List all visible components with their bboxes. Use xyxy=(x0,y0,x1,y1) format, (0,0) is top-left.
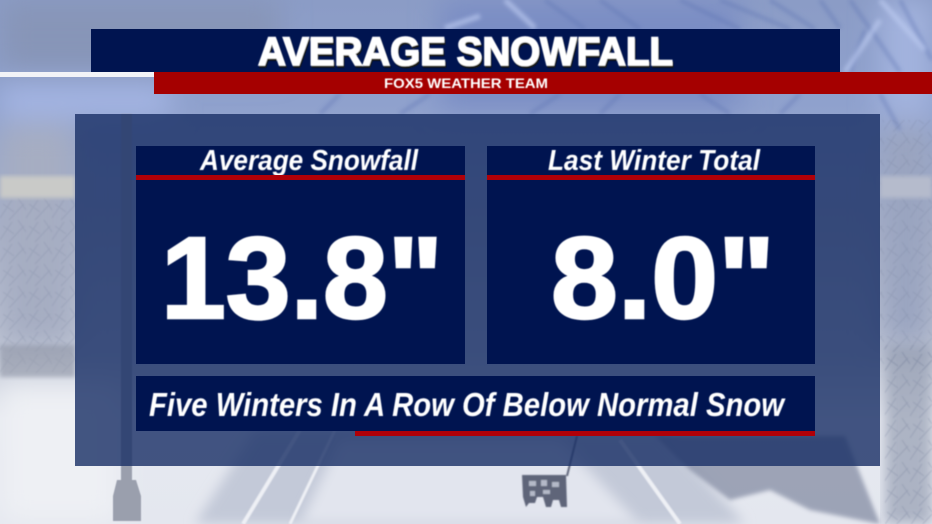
card: average snowfall xyxy=(136,145,465,364)
footer banner xyxy=(136,376,815,436)
snowy path xyxy=(195,430,745,524)
card heading: Average Snowfall xyxy=(199,145,419,177)
value: 13.8" xyxy=(161,213,443,343)
lamp post xyxy=(113,114,141,521)
red rule xyxy=(487,175,815,180)
title text: AVERAGE SNOWFALL xyxy=(258,30,673,74)
translucent navy panel xyxy=(75,114,880,466)
card: last winter total xyxy=(487,145,815,364)
red rule xyxy=(136,175,465,180)
evergreen branches xyxy=(655,436,880,524)
red rule xyxy=(355,431,815,436)
white accent line xyxy=(0,72,154,77)
title text: AVERAGE SNOWFALL xyxy=(259,32,674,76)
subtitle: FOX 5 Weather Team: FOX5 WEATHER TEAM xyxy=(384,76,548,91)
card heading: Last Winter Total xyxy=(548,145,761,177)
park bench xyxy=(522,436,577,507)
footer text: Five Winters In A Row Of Below Normal Snow xyxy=(149,386,786,423)
value: 8.0" xyxy=(551,213,775,343)
twig texture at the sides xyxy=(0,198,75,373)
red subtitle bar xyxy=(154,72,932,94)
title banner xyxy=(91,29,840,76)
